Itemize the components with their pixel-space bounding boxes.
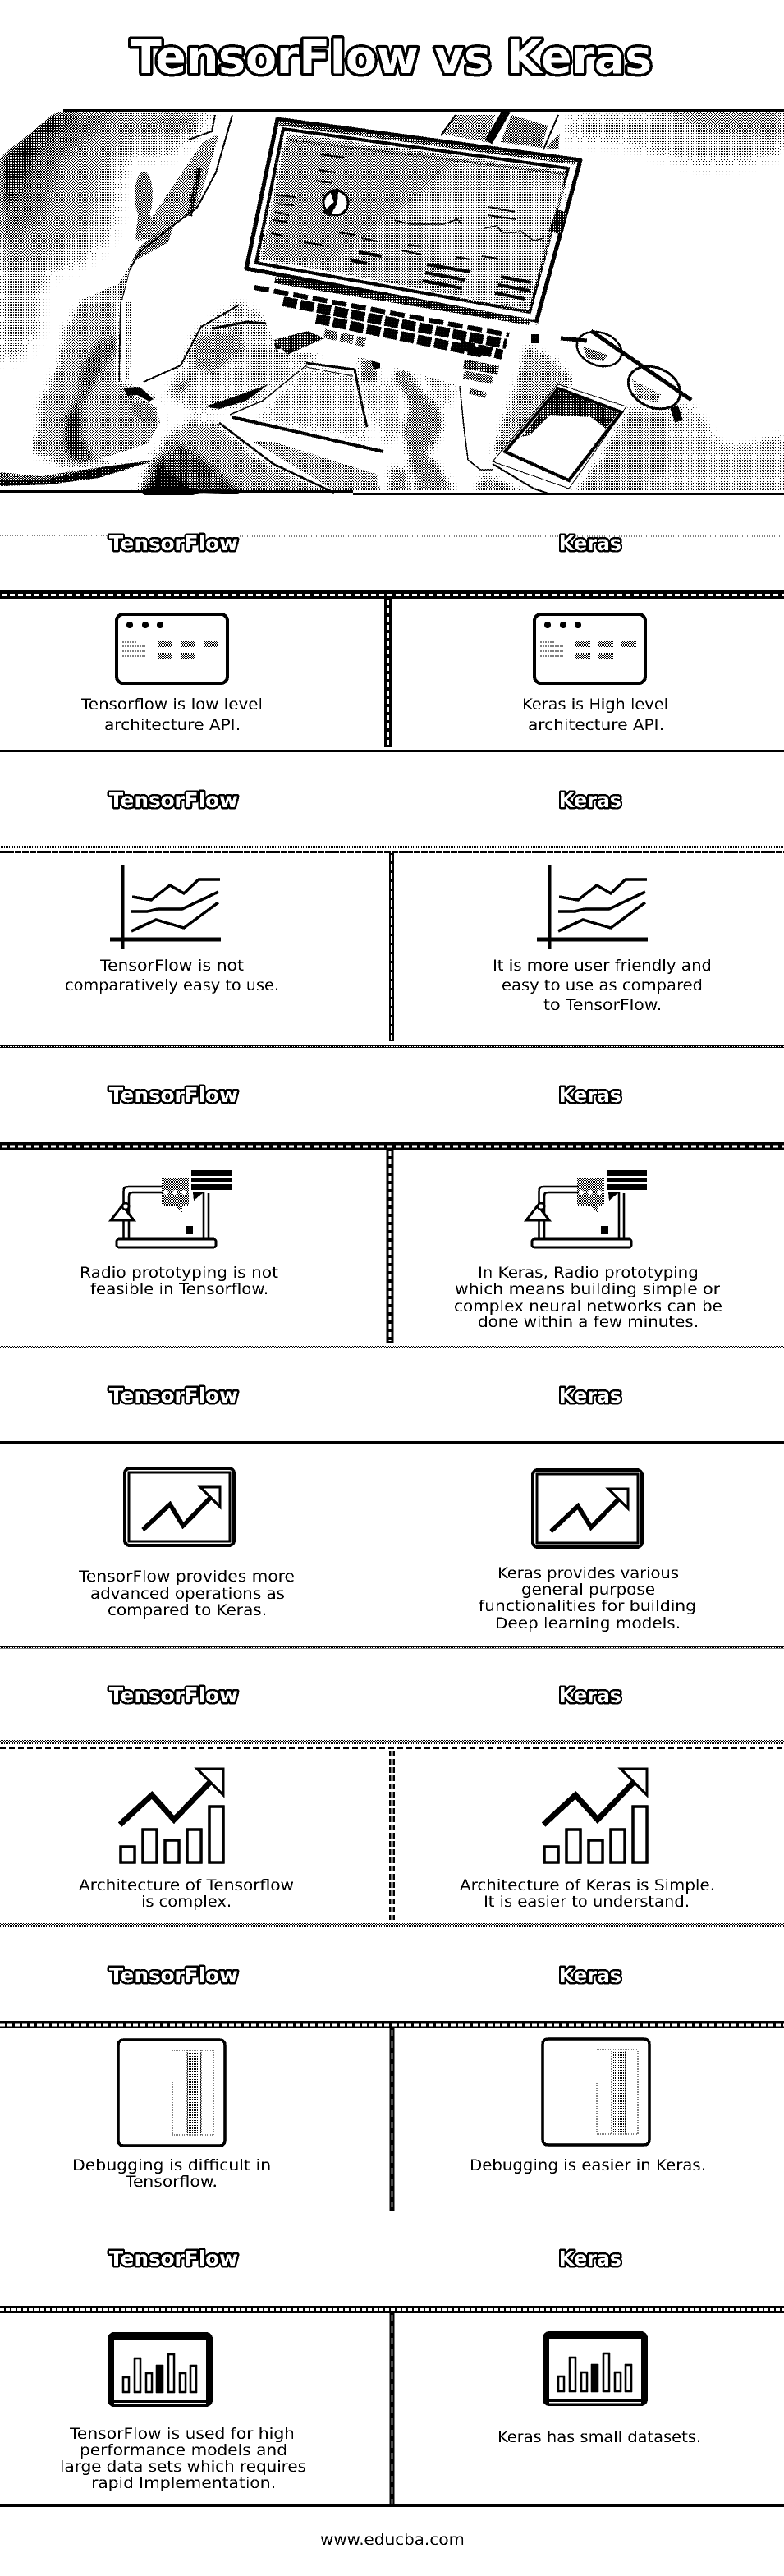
text block: It is more user friendly and xyxy=(493,957,712,975)
text block: Radio prototyping is not xyxy=(80,1264,278,1282)
text block: functionalities for building xyxy=(479,1597,696,1615)
panel: keras ease of use xyxy=(493,865,712,1014)
icon: laptop with chat xyxy=(526,1170,647,1247)
section 2 header row: Keras xyxy=(559,788,621,812)
icon: bars with rising arrow xyxy=(543,1769,647,1862)
text block: complex neural networks can be xyxy=(454,1297,722,1316)
footer url: www.educba.com xyxy=(320,2531,465,2549)
section 4 header row xyxy=(109,1384,621,1407)
icon: app window xyxy=(117,614,227,683)
panel: tensorflow debugging xyxy=(72,2040,271,2191)
text block: Debugging is easier in Keras. xyxy=(470,2156,706,2174)
text block: comparatively easy to use. xyxy=(65,976,279,994)
panel: tensorflow complexity xyxy=(79,1769,294,1911)
elbow shading xyxy=(34,300,164,466)
text block: performance models and xyxy=(80,2441,287,2459)
text block: TensorFlow is not xyxy=(99,957,244,975)
text block: Keras has small datasets. xyxy=(497,2428,701,2446)
section 1 header row: Keras xyxy=(559,531,621,555)
panel: tensorflow datasets xyxy=(60,2332,306,2492)
right hand shading xyxy=(353,358,526,490)
text block: TensorFlow provides more xyxy=(78,1568,295,1586)
section 3 header row: Keras xyxy=(559,1083,621,1107)
text block: feasible in Tensorflow. xyxy=(90,1280,268,1298)
panel: tensorflow operations xyxy=(78,1468,295,1619)
panel: keras debugging xyxy=(470,2039,706,2174)
icon: bar chart tablet xyxy=(108,2332,213,2407)
panel: keras complexity xyxy=(460,1769,715,1911)
panel: tensorflow ease of use xyxy=(65,865,279,994)
section 1 header row: TensorFlow xyxy=(109,531,238,555)
section 7 header row: TensorFlow xyxy=(109,2247,238,2271)
icon: trend in frame xyxy=(125,1468,234,1545)
section 7 header row: Keras xyxy=(559,2247,621,2271)
book behind laptop xyxy=(441,111,560,149)
section 6 header row xyxy=(109,1963,621,1987)
section 3 header row: TensorFlow xyxy=(109,1083,238,1107)
section 3 header row xyxy=(109,1083,621,1107)
text block xyxy=(460,1876,715,1911)
text block: Deep learning models. xyxy=(495,1614,681,1632)
glasses xyxy=(561,326,691,421)
text block: is complex. xyxy=(141,1893,232,1911)
text block xyxy=(79,1876,294,1911)
icon: line chart xyxy=(537,865,648,949)
text block: In Keras, Radio prototyping xyxy=(478,1264,699,1282)
text block: Tensorflow. xyxy=(125,2173,218,2191)
section 2 header row xyxy=(109,788,621,812)
section 6 header row: TensorFlow xyxy=(109,1963,238,1987)
text block: architecture API. xyxy=(104,716,241,734)
text block: architecture API. xyxy=(528,716,664,734)
text block xyxy=(65,957,279,994)
text block: large data sets which requires xyxy=(60,2458,306,2476)
text block xyxy=(493,957,712,1014)
hero photo: hands typing on a laptop xyxy=(0,107,784,501)
text block: general purpose xyxy=(521,1581,655,1599)
icon: document frame xyxy=(118,2040,225,2146)
text block: which means building simple or xyxy=(455,1280,720,1298)
text block: TensorFlow is used for high xyxy=(69,2425,295,2443)
desk shading xyxy=(493,107,784,501)
text block: compared to Keras. xyxy=(108,1601,267,1619)
text block xyxy=(80,696,263,734)
icon: document frame xyxy=(543,2039,649,2145)
section 4 header row: Keras xyxy=(559,1384,621,1407)
sleeve shading xyxy=(0,111,209,357)
text block: done within a few minutes. xyxy=(478,1313,699,1331)
photo frame lines xyxy=(0,109,784,495)
keyboard xyxy=(246,277,539,395)
section 7 header row xyxy=(109,2247,621,2271)
panel: keras architecture level xyxy=(522,614,668,734)
text block xyxy=(454,1264,722,1331)
text block xyxy=(60,2425,306,2492)
section 6 header row: Keras xyxy=(559,1963,621,1987)
text block: Architecture of Keras is Simple. xyxy=(460,1876,715,1894)
icon: bar chart tablet xyxy=(543,2331,648,2406)
right hand details xyxy=(371,361,493,471)
panel: keras datasets xyxy=(497,2331,701,2446)
text block: rapid Implementation. xyxy=(91,2474,276,2492)
section 5 header row: TensorFlow xyxy=(109,1683,238,1707)
section 4 header row: TensorFlow xyxy=(109,1384,238,1407)
text block: easy to use as compared xyxy=(502,976,703,994)
text block: Debugging is difficult in xyxy=(72,2156,271,2174)
light wedge under trackpad xyxy=(252,441,380,490)
text block: advanced operations as xyxy=(90,1585,285,1603)
section 2 header row: TensorFlow xyxy=(109,788,238,812)
text block xyxy=(78,1568,295,1619)
section 5 header row: Keras xyxy=(559,1683,621,1707)
section 1 header row xyxy=(0,531,784,555)
trackpad xyxy=(219,363,383,493)
elbow highlights and clasp xyxy=(99,300,168,464)
icon: bars with rising arrow xyxy=(120,1769,223,1862)
text block xyxy=(522,696,668,734)
text block xyxy=(80,1264,278,1298)
text block xyxy=(479,1564,696,1632)
dark area under arm xyxy=(137,420,337,496)
title: TensorFlow vs Keras xyxy=(131,31,652,85)
lower left wedge xyxy=(0,461,150,486)
icon: laptop with chat xyxy=(111,1170,232,1247)
section 5 header row xyxy=(109,1683,621,1707)
wrist lines xyxy=(144,305,306,415)
panel: tensorflow prototyping xyxy=(80,1170,278,1298)
text block: It is easier to understand. xyxy=(484,1893,690,1911)
icon: app window xyxy=(534,614,645,683)
icon: line chart xyxy=(110,865,221,949)
text block: Architecture of Tensorflow xyxy=(79,1876,294,1894)
laptop lid and screen xyxy=(246,119,580,323)
text block: Tensorflow is low level xyxy=(80,696,263,714)
text block: Keras is High level xyxy=(522,696,668,714)
text block: Keras provides various xyxy=(497,1564,679,1582)
arm fold xyxy=(82,115,232,382)
text block xyxy=(72,2156,271,2191)
panel: tensorflow architecture level xyxy=(80,614,263,734)
panel: keras prototyping xyxy=(454,1170,722,1331)
wrist shading xyxy=(168,302,328,415)
text block: to TensorFlow. xyxy=(543,996,662,1014)
panel: keras operations xyxy=(479,1470,696,1632)
icon: trend in frame xyxy=(533,1470,642,1547)
phone xyxy=(493,384,626,497)
